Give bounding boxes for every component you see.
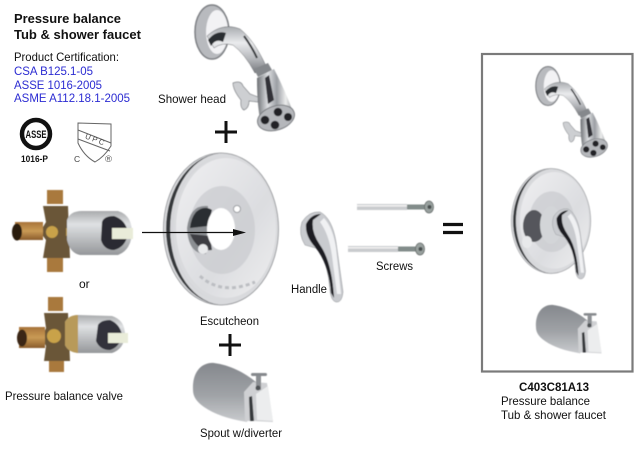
product name: Pressure balance [501,394,590,408]
spout with diverter [193,363,273,422]
product certification list: ASSE 1016-2005 [14,78,102,92]
model number: C403C81A13 [519,380,589,394]
arrow: valve into escutcheon [142,229,246,236]
icon: ASSE certification badge [21,120,50,165]
icon: UPC shield: ® [105,154,112,165]
label: or: or [79,277,90,291]
icon: ASSE certification badge: ASSE [26,129,46,141]
title: Tub & shower faucet [14,27,142,42]
valve upper [12,190,133,272]
title [14,11,142,42]
product name: Tub & shower faucet [501,408,607,422]
product certification list: Product Certification: [14,50,119,64]
shower head [195,5,298,135]
product name [501,394,607,422]
screw lower [348,243,424,255]
handle [301,212,343,302]
label: escutcheon: Escutcheon [200,316,259,328]
label: handle: Handle [291,284,327,296]
plus sign upper [215,121,237,143]
plus sign lower [219,334,241,356]
equals sign [443,224,463,232]
icon: UPC shield [74,123,112,165]
title: Pressure balance [14,11,121,26]
panel: assembled faucet [482,54,632,372]
product certification list [14,50,130,105]
icon: UPC shield: C [74,154,80,164]
icon: UPC shield: U P C [84,132,106,147]
assembled handle [552,209,586,279]
valve lower [17,297,128,372]
screw upper [357,201,434,213]
assembled escutcheon [511,169,591,273]
product certification list: ASME A112.18.1-2005 [14,91,130,105]
label: spout with diverter: Spout w/diverter [200,426,282,440]
product certification list: CSA B125.1-05 [14,64,93,78]
label: screws: Screws [376,261,413,273]
assembled spout [536,305,602,353]
assembled handle hub [522,206,562,248]
escutcheon plate [164,153,278,305]
label: shower head: Shower head [158,92,226,106]
assembled shower head [536,67,610,160]
icon: ASSE certification badge: 1016-P [21,154,49,165]
label: pressure balance valve: Pressure balance valve [5,389,123,403]
